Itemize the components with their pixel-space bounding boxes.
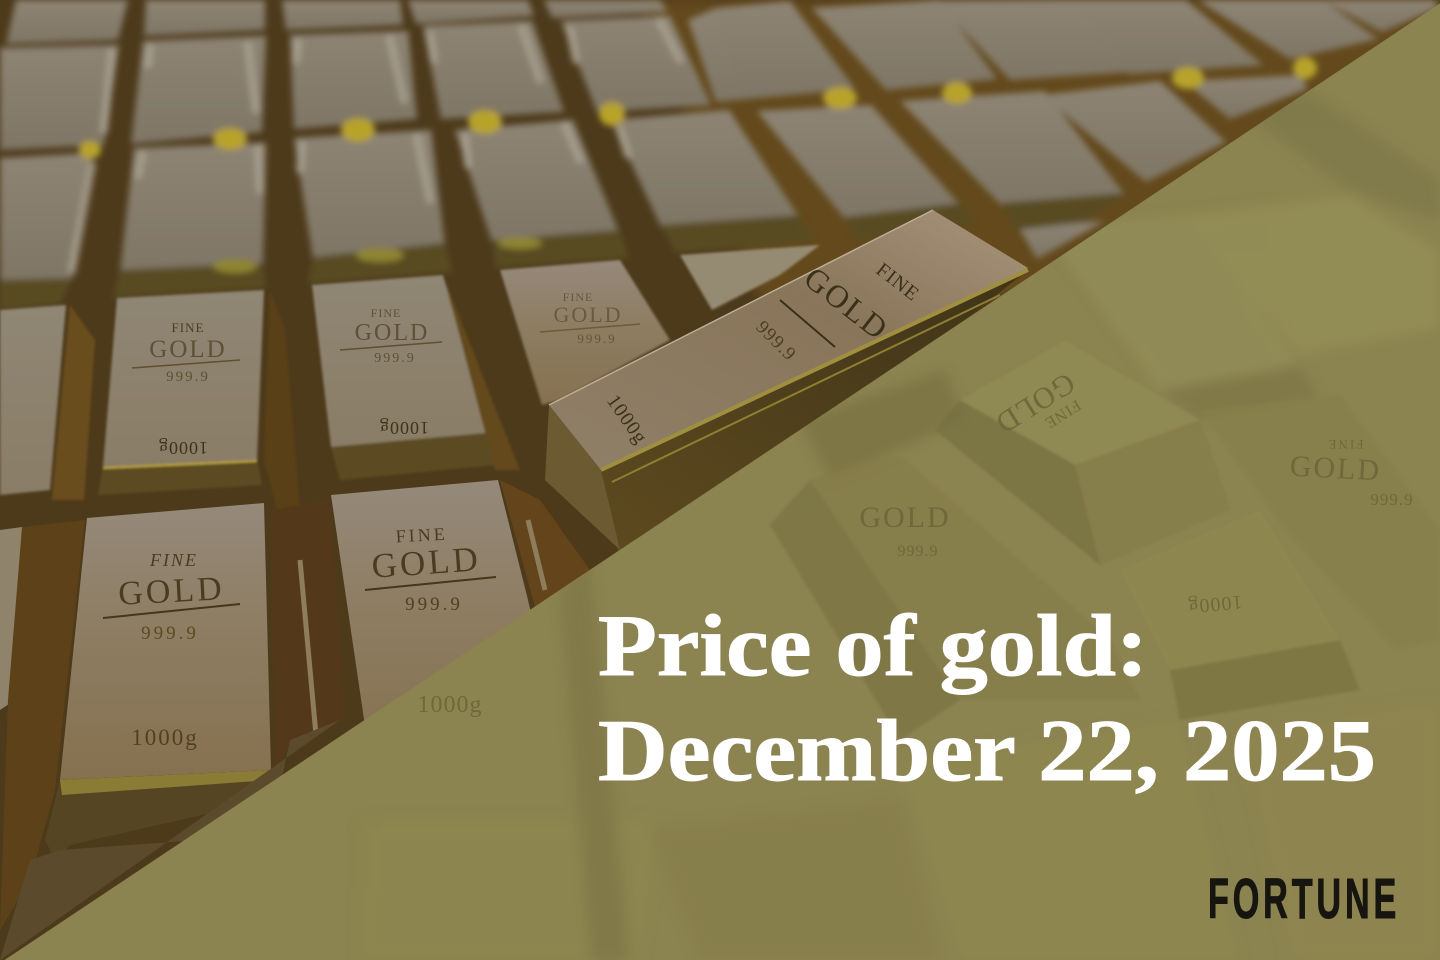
faint embossed text under overlay [418, 366, 1414, 718]
tilted gold bar: 1000g [602, 391, 652, 448]
embossed text on near bars: FINE [563, 290, 593, 304]
logo: FORTUNE wordmark: FORTUNE [1208, 866, 1400, 930]
faint embossed text under overlay: 1000g [418, 692, 482, 718]
embossed text on near bars: GOLD [370, 539, 482, 586]
embossed text on near bars: FINE [172, 320, 204, 335]
embossed text on near bars: GOLD [149, 336, 227, 363]
embossed text on near bars: 999.9 [374, 351, 416, 366]
embossed text on near bars: FINE [395, 524, 448, 546]
faint embossed text under overlay: GOLD [859, 501, 951, 534]
title [598, 598, 1376, 800]
tilted gold bar: GOLD [798, 259, 896, 347]
embossed text on near bars: 999.9 [577, 331, 617, 346]
title line 1: Price of gold: [598, 598, 1148, 695]
embossed text on near bars: 999.9 [141, 623, 199, 644]
embossed text on near bars: 999.9 [405, 594, 463, 615]
title line 2: December 22, 2025 [598, 703, 1376, 800]
embossed text on near bars: GOLD [355, 320, 429, 346]
embossed text on near bars: 999.9 [166, 369, 210, 385]
faint embossed text under overlay: FINE [1327, 437, 1363, 452]
faint embossed text under overlay: 999.9 [1370, 490, 1414, 509]
yellow reflection spots [79, 57, 1317, 273]
faint embossed text under overlay: GOLD [1289, 450, 1382, 487]
embossed text on near bars: FINE [149, 550, 198, 570]
tilted gold bar: FINE [872, 259, 924, 306]
bright edge glints [72, 22, 680, 270]
faint embossed text under overlay: 1000g [1187, 591, 1243, 617]
embossed text on near bars: FINE [371, 306, 401, 320]
front faces between rows [0, 193, 1125, 310]
embossed text on near bars: 1000g [158, 438, 208, 458]
gold bars: far rows [0, 0, 1440, 282]
tilted gold bar [545, 210, 1028, 560]
faint embossed text under overlay: FINE [1041, 396, 1084, 432]
gold bars: middle row [0, 245, 820, 520]
faint embossed text under overlay: 999.9 [898, 543, 938, 560]
embossed text on near bars: 1000g [131, 725, 199, 750]
faint embossed text under overlay: GOLD [989, 366, 1081, 440]
embossed text on near bars: GOLD [553, 302, 623, 327]
embossed text on near bars [103, 290, 640, 750]
embossed text on near bars: 1000g [379, 418, 429, 438]
gold bars: near row [60, 503, 271, 780]
embossed text on near bars: GOLD [117, 570, 226, 613]
tilted gold bar: 999.9 [752, 317, 800, 365]
